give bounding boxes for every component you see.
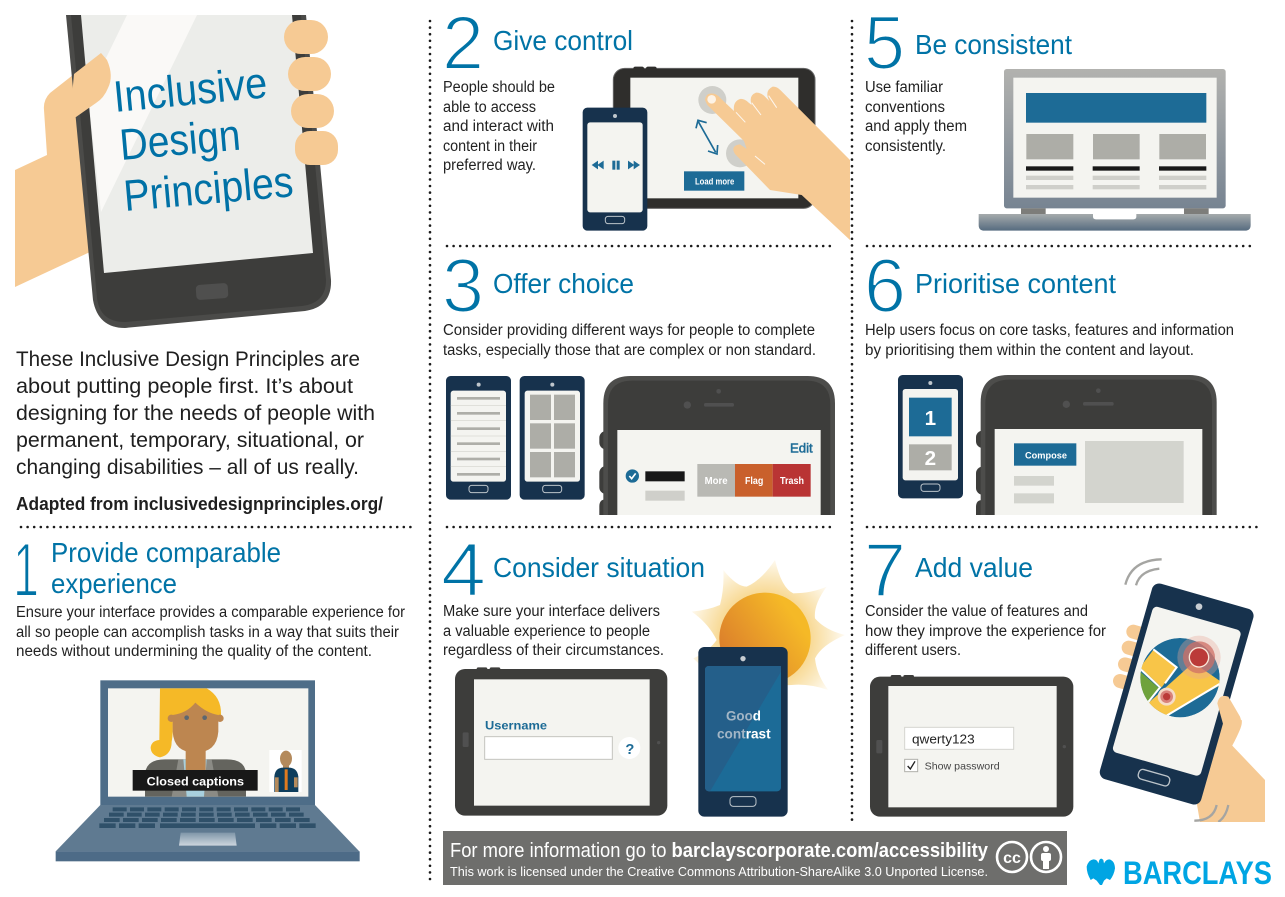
footer banner <box>443 831 1067 885</box>
small phone: 1 <box>925 407 936 430</box>
illustration: phones and large phone <box>446 376 835 515</box>
caption bar <box>133 770 258 791</box>
keyboard <box>99 809 317 826</box>
intro text: designing for the needs of people with <box>16 402 375 425</box>
more information line: For more information go to barclayscorporate.com/accessibility <box>450 840 989 862</box>
body text: consistently. <box>865 138 946 155</box>
number 7: 7 <box>864 528 906 613</box>
body text: by prioritising them within the content and layout. <box>865 342 1194 359</box>
tablet with username field: Username <box>485 718 547 732</box>
intro text: about putting people first. It’s about <box>16 375 353 398</box>
map pins <box>1158 636 1221 706</box>
phone with good contrast: Good <box>726 708 761 724</box>
double arrow <box>696 120 718 154</box>
body text <box>443 79 555 174</box>
body text: content in their <box>443 138 537 155</box>
load more button: Load more <box>695 176 734 186</box>
phone inner bezel <box>71 15 326 322</box>
caption bar: Closed captions <box>147 775 244 789</box>
phone screen <box>81 15 313 273</box>
intro text: permanent, temporary, situational, or <box>16 429 364 452</box>
icon: hand palm <box>15 53 111 287</box>
number 2: 2 <box>442 1 484 86</box>
icon: hand behind phone <box>1120 632 1265 822</box>
tablet with password field <box>870 675 1073 817</box>
body text <box>16 604 405 660</box>
heading: Offer choice <box>493 268 634 299</box>
swipe action buttons: Flag <box>745 476 763 487</box>
hero illustration: hand holding phone <box>15 15 338 328</box>
swipe action buttons: More <box>705 476 728 487</box>
intro text: These Inclusive Design Principles are <box>16 348 360 371</box>
heading: Add value <box>915 552 1033 583</box>
signal arcs <box>1125 559 1228 822</box>
heading <box>51 537 281 599</box>
icon: phone body <box>66 15 331 328</box>
icon: eagle <box>1087 859 1115 885</box>
tablet <box>613 67 815 208</box>
body text: Use familiar <box>865 79 943 96</box>
phone with media controls <box>583 108 647 231</box>
body text: People should be <box>443 79 555 96</box>
body text: Help users focus on core tasks, features and information <box>865 322 1234 339</box>
small phone <box>898 375 963 498</box>
panel: principle 5 <box>864 1 1251 231</box>
icon: sun <box>692 560 845 690</box>
body text: a valuable experience to people <box>443 623 650 640</box>
body text: all so people can accomplish tasks in a way that suits their <box>16 624 399 641</box>
compose button <box>1014 443 1076 466</box>
heading: experience <box>51 568 177 599</box>
tablet with password field: Show password <box>925 762 1000 773</box>
number 4: 4 <box>441 528 486 613</box>
tablet with username field: ? <box>625 742 634 758</box>
trackpad <box>179 833 237 846</box>
phone <box>1098 582 1255 806</box>
licence line: This work is licensed under the Creative Commons Attribution-ShareAlike 3.0 Unported License. <box>450 864 988 879</box>
logo: Barclays <box>1087 855 1272 891</box>
title <box>111 58 295 221</box>
body text: regardless of their circumstances. <box>443 642 664 659</box>
title: Inclusive <box>111 58 269 122</box>
compose button: Compose <box>1025 451 1067 461</box>
icon: laptop with closed captions <box>56 680 360 861</box>
illustration: laptop with consistent layout <box>979 69 1251 231</box>
icon: thumb <box>1217 696 1241 750</box>
heading: Be consistent <box>915 29 1072 60</box>
phone home button <box>196 283 229 300</box>
icon: fingers <box>284 20 338 165</box>
number 3: 3 <box>442 244 484 329</box>
tablet with password field: qwerty123 <box>912 731 975 746</box>
large phone <box>976 375 1217 515</box>
body text <box>865 603 1106 659</box>
heading: Provide comparable <box>51 537 281 568</box>
source credit: Adapted from inclusivedesignprinciples.org/ <box>16 494 383 514</box>
intro text: changing disabilities – all of us really. <box>16 456 359 479</box>
number 5: 5 <box>864 1 905 86</box>
icon: creative commons <box>997 842 1027 872</box>
illustration: tablet, phone and hand <box>583 67 850 240</box>
illustration: prioritised phone screens <box>898 375 1217 515</box>
body text <box>443 322 816 359</box>
laptop base <box>56 805 359 851</box>
small phone: 2 <box>925 447 936 470</box>
body text: needs without undermining the quality of the content. <box>16 643 372 660</box>
body text <box>865 322 1234 359</box>
body text: tasks, especially those that are complex or non standard. <box>443 342 816 359</box>
swipe action buttons: Trash <box>780 476 804 487</box>
sign language interpreter <box>269 750 302 792</box>
panel: principle 3 <box>442 244 835 515</box>
body text: and apply them <box>865 118 967 135</box>
panel: principle 4 <box>441 528 845 817</box>
body text: conventions <box>865 99 945 116</box>
panel: principle 6 <box>864 244 1234 515</box>
swipe action buttons <box>697 464 811 497</box>
body text: different users. <box>865 642 961 659</box>
icon: map <box>1140 638 1220 718</box>
number 6: 6 <box>864 244 906 329</box>
intro text <box>16 348 375 479</box>
body text: Ensure your interface provides a comparable experience for <box>16 604 405 621</box>
body text: Consider providing different ways for people to complete <box>443 322 815 339</box>
large phone <box>599 376 835 515</box>
phone with grid view <box>520 376 585 500</box>
checked row <box>626 469 685 501</box>
body text: and interact with <box>443 118 554 135</box>
illustration: tablet, sun and phone <box>455 560 845 817</box>
phone with good contrast: contrast <box>717 725 771 741</box>
load more button <box>684 171 744 191</box>
body text <box>443 603 664 659</box>
body text: preferred way. <box>443 157 536 174</box>
heading: Give control <box>493 25 633 56</box>
body text <box>865 79 967 155</box>
panel: principle 1 <box>13 528 405 861</box>
icon: creative commons: cc <box>1003 850 1021 867</box>
illustration: tablet and map phone <box>870 559 1265 822</box>
body text: how they improve the experience for <box>865 623 1106 640</box>
body text: able to access <box>443 99 536 116</box>
title: Principles <box>122 157 295 221</box>
heading: Consider situation <box>493 552 705 583</box>
body text: Consider the value of features and <box>865 603 1088 620</box>
icon: attribution <box>1031 842 1061 872</box>
icon: hand <box>705 87 850 240</box>
screen glare <box>88 15 197 212</box>
icon: thumb <box>70 53 111 118</box>
heading: Prioritise content <box>915 268 1116 299</box>
edit link: Edit <box>790 442 813 456</box>
panel: principle 2 <box>442 1 850 240</box>
woman on video call <box>145 688 246 797</box>
phone with good contrast <box>698 647 788 817</box>
body text: Make sure your interface delivers <box>443 603 660 620</box>
phone with list view <box>446 376 511 500</box>
number 1: 1 <box>13 528 39 613</box>
panel: principle 7 <box>864 528 1265 822</box>
tablet with username field <box>455 667 667 816</box>
title: Design <box>118 111 242 170</box>
